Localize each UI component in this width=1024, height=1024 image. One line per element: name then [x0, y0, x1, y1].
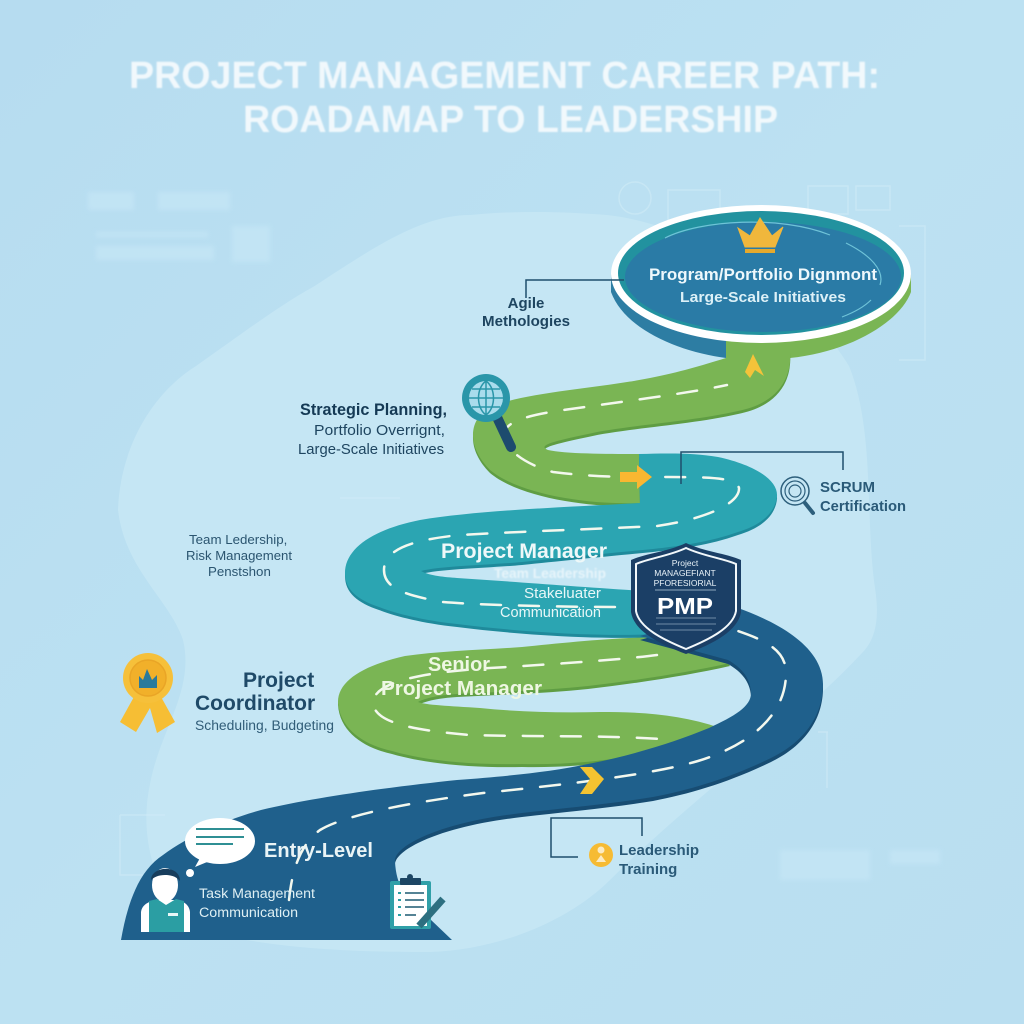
summit title: Program/Portfolio Dignmont: [649, 265, 877, 284]
label: entry level: Entry-Level: [264, 840, 373, 862]
badge: PMP shield: PFORESIORIAL: [654, 578, 717, 588]
text: project coordinator: Coordinator: [195, 692, 315, 715]
text: team leadership: [186, 532, 292, 579]
background faint panels: [88, 192, 940, 880]
label: project manager: Project Manager: [441, 540, 607, 563]
badge: PMP shield: MANAGEFIANT: [654, 568, 716, 578]
label: senior project manager: Senior: [428, 654, 490, 676]
title: PROJECT MANAGEMENT CAREER PATH:: [129, 55, 880, 97]
label: task management communication: Communication: [199, 905, 298, 920]
text: scrum certification: Certification: [820, 498, 906, 515]
badge: PMP shield: Project: [672, 558, 699, 568]
connector: agile: [526, 280, 624, 298]
road: teal segment: [345, 453, 777, 638]
text: team leadership: Risk Management: [186, 548, 292, 563]
text: project coordinator: [195, 669, 315, 715]
text: leadership training: Leadership: [619, 842, 699, 859]
text: project coordinator: Project: [243, 669, 314, 692]
icon: speech bubble: [185, 818, 255, 877]
connector: scrum: [681, 452, 843, 484]
icon: leadership badge: [589, 843, 613, 867]
text: agile methodologies: Methologies: [482, 313, 570, 330]
road: upper green segment: [473, 350, 790, 506]
connector: leadership: [551, 818, 642, 857]
label: senior project manager: Project Manager: [381, 678, 542, 700]
text: team leadership: Team Ledership,: [189, 532, 287, 547]
badge: PMP shield: PMP: [657, 593, 713, 619]
badge: PMP shield: [631, 543, 741, 654]
icon: crown: [738, 218, 783, 253]
text: scheduling budgeting: Scheduling, Budgeting: [195, 718, 334, 733]
title: [129, 55, 880, 141]
road: dark blue segment: [121, 608, 823, 944]
icon: person: [141, 868, 190, 932]
text: strategic planning: Strategic Planning,: [300, 401, 447, 419]
label: team leadership faded: Team Leadership: [494, 566, 606, 581]
icon: clipboard: [390, 874, 443, 929]
text: team leadership: Penstshon: [208, 564, 271, 579]
text: strategic planning: Large-Scale Initiatives: [298, 442, 444, 458]
road arrow: teal junction: [620, 465, 652, 489]
icon: globe magnifier: [462, 374, 511, 447]
label: task management communication: [199, 886, 315, 920]
text: agile methodologies: Agile: [508, 295, 544, 312]
label: stakeholder communication: Stakeluater: [524, 585, 601, 602]
road arrow: blue chevron: [580, 767, 604, 794]
road arrow: summit: [745, 354, 764, 378]
road: summit base: [611, 274, 911, 358]
title: ROADAMAP TO LEADERSHIP: [243, 99, 778, 141]
summit platform: [611, 205, 911, 343]
road dashes: [289, 385, 786, 900]
icon: scrum magnifier: [781, 477, 813, 513]
background light blob: [118, 212, 877, 952]
text: strategic planning: [298, 401, 447, 458]
label: task management communication: Task Management: [199, 886, 315, 901]
background faint outlines: [120, 182, 925, 875]
label: stakeholder communication: Communication: [500, 604, 601, 621]
summit subtitle: Large-Scale Initiatives: [680, 289, 846, 306]
text: scrum certification: SCRUM: [820, 479, 875, 496]
text: strategic planning: Portfolio Overrignt,: [314, 422, 445, 439]
road: lower green segment: [338, 637, 730, 767]
text: leadership training: Training: [619, 861, 677, 878]
icon: ribbon medal: [120, 653, 175, 733]
